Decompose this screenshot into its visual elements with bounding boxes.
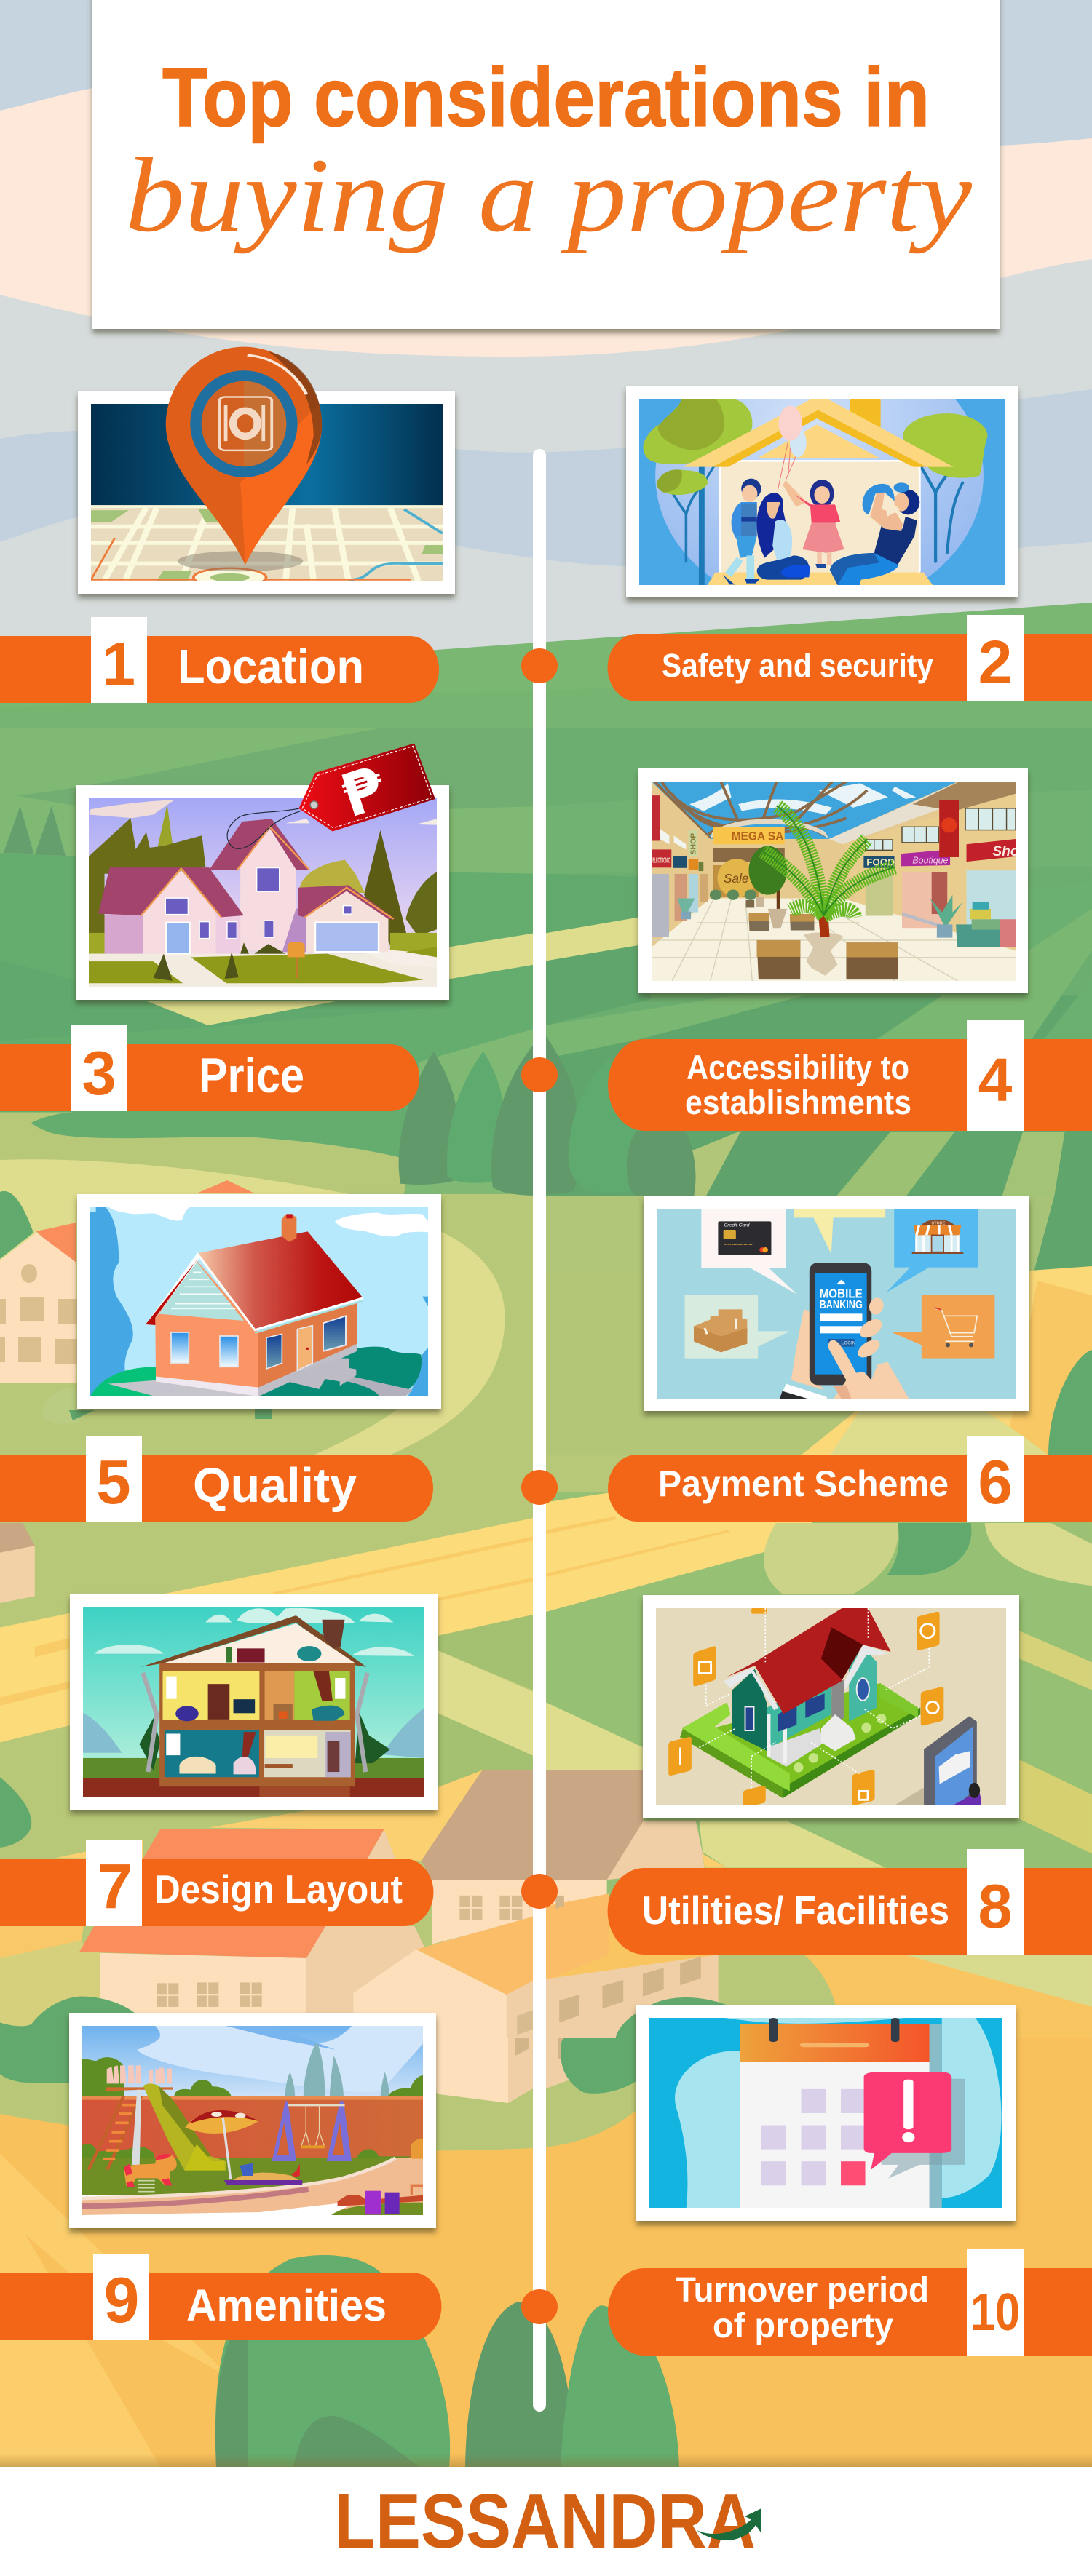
panel 4: accessibility image: Sale <box>724 871 748 886</box>
label bar 5: Quality: 5 <box>96 1448 131 1517</box>
label bar 1: Location: Location <box>178 640 364 694</box>
icon: green arrow <box>697 2508 761 2540</box>
label bar 10: Turnover period: Turnover period <box>676 2271 929 2310</box>
mid fields <box>0 1273 1092 1535</box>
timeline dot 2 <box>521 1057 558 1092</box>
panel 10: turnover image <box>636 2005 1016 2221</box>
lower hills <box>0 2038 546 2150</box>
label bar 2: Safety and security <box>608 615 1092 701</box>
timeline dot 5 <box>521 2289 558 2324</box>
left house <box>36 1223 76 1270</box>
panel 3: price image <box>76 785 449 1000</box>
panel 9: amenities image <box>69 2013 436 2228</box>
label bar 3: Price: Price <box>199 1048 304 1103</box>
panel 4: accessibility image: ELECTRONIC <box>652 856 670 865</box>
label bar 4: Accessibility <box>608 1020 1092 1131</box>
panel 4: accessibility image: Shop <box>992 844 1028 859</box>
price tag <box>227 744 435 848</box>
panel 2: safety image <box>626 340 1018 611</box>
label bar 1: Location: 1 <box>102 630 135 698</box>
label bar 9: Amenities <box>0 2254 441 2340</box>
label bar 8: Utilities <box>608 1849 1092 1955</box>
panel 6: payment image: BANKING <box>820 1299 863 1311</box>
panel 8: utilities image <box>643 1595 1019 1818</box>
timeline dot 1 <box>521 648 558 683</box>
panel 6: payment image: STORE <box>932 1222 946 1226</box>
timeline dot 4 <box>521 1874 558 1909</box>
label bar 2: Safety and security: 2 <box>978 628 1012 696</box>
label bar 10: Turnover period: 10 <box>970 2283 1020 2342</box>
panel 4: accessibility image <box>638 768 1028 993</box>
label bar 10: Turnover period: of property <box>713 2307 893 2345</box>
label bar 10: Turnover period <box>608 2249 1092 2356</box>
panel 6: payment image: MOBILE <box>820 1287 863 1300</box>
label bar 3: Price: 3 <box>82 1039 116 1108</box>
label bar 6: Payment Scheme <box>608 1436 1092 1522</box>
label bar 9: Amenities: 9 <box>104 2264 139 2336</box>
label bar 5: Quality <box>0 1436 433 1522</box>
panel 7: design layout image <box>70 1594 438 1810</box>
label bar 6: Payment Scheme: 6 <box>978 1448 1013 1517</box>
panel 4: accessibility image: SHOP <box>689 833 697 855</box>
label bar 2: Safety and security: Safety and security <box>662 647 933 684</box>
header card <box>92 0 1000 329</box>
label bar 4: Accessibility: 4 <box>978 1046 1013 1114</box>
label bar 4: Accessibility: Accessibility to <box>687 1048 909 1086</box>
label bar 7: Design Layout: 7 <box>98 1851 132 1922</box>
title line 1: Top considerations in <box>162 52 930 144</box>
label bar 5: Quality: Quality <box>193 1458 357 1513</box>
label bar 3: Price <box>0 1025 419 1111</box>
panel 6: payment image: LOGIN <box>842 1340 855 1345</box>
label bar 8: Utilities: 8 <box>978 1872 1013 1941</box>
footer band <box>0 2467 1092 2576</box>
panel 4: accessibility image: MEGA SA <box>732 830 784 843</box>
bottom domed trees <box>215 2255 450 2467</box>
label bar 9: Amenities: Amenities <box>186 2281 387 2330</box>
title line 2 script: buying a property <box>125 137 972 255</box>
label bar 8: Utilities: Utilities/ Facilities <box>642 1888 949 1933</box>
panel 1: location image <box>78 391 455 594</box>
timeline spine <box>533 449 546 2412</box>
label bar 6: Payment Scheme: Payment Scheme <box>658 1463 949 1504</box>
panel 5: quality image <box>77 1194 441 1409</box>
logo: Lessandra: LESSANDRA <box>334 2478 756 2564</box>
panel 6: payment image: Credit Card <box>724 1223 750 1228</box>
label bar 1: Location <box>0 617 439 703</box>
price tag: ₱ <box>333 754 394 832</box>
timeline dot 3 <box>521 1470 558 1505</box>
label bar 4: Accessibility: establishments <box>685 1083 911 1121</box>
icon: map pin <box>166 347 322 565</box>
panel 4: accessibility image: Boutique <box>912 856 949 866</box>
panel 4: accessibility image: FOOD <box>866 856 895 867</box>
label bar 7: Design Layout <box>0 1840 433 1926</box>
label bar 7: Design Layout: Design Layout <box>154 1867 403 1912</box>
panel 6: payment image <box>644 1196 1029 1411</box>
